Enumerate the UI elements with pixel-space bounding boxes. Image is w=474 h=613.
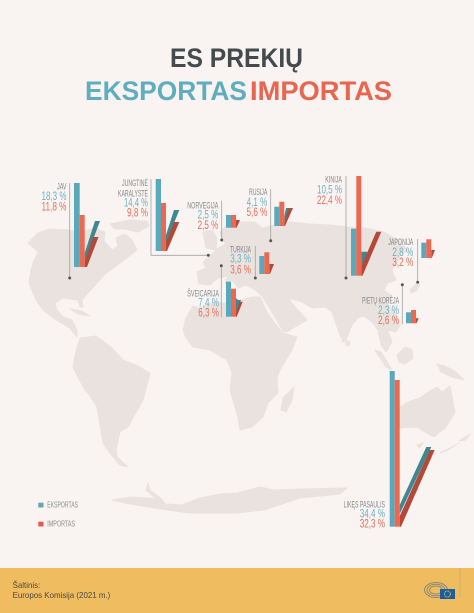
title: ES PREKIŲ [170,43,303,73]
label: Jungtinė Karalystė [118,178,148,220]
bars: Turkija [230,245,274,280]
label: Kinija: 10,5 % [317,184,342,196]
label: Norvegija: NORVEGIJA [187,200,218,210]
bars: Pietų Korėja [362,283,419,327]
title: EKSPORTAS [85,76,247,106]
label: Turkija: 3,6 % [230,264,251,276]
label: Kinija: 22,4 % [317,195,342,207]
label: Japonija: 3,2 % [392,257,413,269]
label: Pietų Korėja [362,295,399,327]
legend [38,500,78,529]
legend: EKSPORTAS [47,500,78,510]
label: Rusija: RUSIJA [249,187,267,197]
label: Šveicarija [187,289,219,320]
bars: Norvegija [187,200,240,242]
source text: Europos Komisija (2021 m.) [13,590,110,600]
label: Turkija: TURKIJA [230,245,251,255]
bars: Jungtinė Karalystė [118,178,210,257]
label: Jungtinė Karalystė: 14,4 % [124,198,148,210]
label: Jungtinė Karalystė: KARALYSTĖ [118,189,148,199]
world map [28,220,470,513]
label: Pietų Korėja: 2,3 % [378,305,399,317]
label: Kinija [317,175,342,207]
label: Jungtinė Karalystė: JUNGTINĖ [122,178,148,188]
title [85,43,392,106]
label: Rusija: 5,6 % [247,207,267,219]
label: Likęs pasaulis: LIKĘS PASAULIS [344,499,385,509]
source text: Šaltinis: [13,580,40,590]
label: JAV: 11,8 % [42,202,66,214]
bars: JAV [42,181,100,280]
label: Rusija [247,187,267,219]
bars: Rusija [247,187,293,242]
label: JAV: 18,3 % [42,191,66,203]
label: Japonija: 2,8 % [392,247,413,259]
label: Japonija: JAPONIJA [388,237,413,247]
bars: Šveicarija [187,264,243,320]
label: Likęs pasaulis [344,499,385,531]
bars: Likęs pasaulis [344,371,435,531]
label: Šveicarija: 6,3 % [198,308,219,320]
bars: Japonija [388,237,435,284]
label: Pietų Korėja: 2,6 % [378,315,399,327]
label: Norvegija: 2,5 % [198,209,218,221]
label: Likęs pasaulis: 34,4 % [360,508,385,520]
label: JAV: JAV [57,181,66,191]
source text [13,580,110,600]
footer band [0,568,474,613]
label: Jungtinė Karalystė: 9,8 % [127,208,148,220]
title: IMPORTAS [250,76,392,106]
label: Likęs pasaulis: 32,3 % [360,519,385,531]
label: Pietų Korėja: PIETŲ KORĖJA [362,295,399,305]
label: JAV [42,181,66,214]
icon: European Parliament logo: Europos Parlamentas [458,568,462,597]
label: Šveicarija: ŠVEICARIJA [187,289,219,299]
label: Šveicarija: 7,4 % [198,298,219,310]
legend: IMPORTAS [47,519,75,529]
icon: European Parliament logo [424,568,462,599]
bars: Kinija [317,175,381,280]
label: Turkija [230,245,251,276]
label: Turkija: 3,3 % [230,254,251,266]
label: Kinija: KINIJA [325,175,342,185]
label: Japonija [388,237,413,269]
label: Rusija: 4,1 % [247,197,267,209]
label: Norvegija: 2,5 % [198,220,218,232]
label: Norvegija [187,200,218,232]
